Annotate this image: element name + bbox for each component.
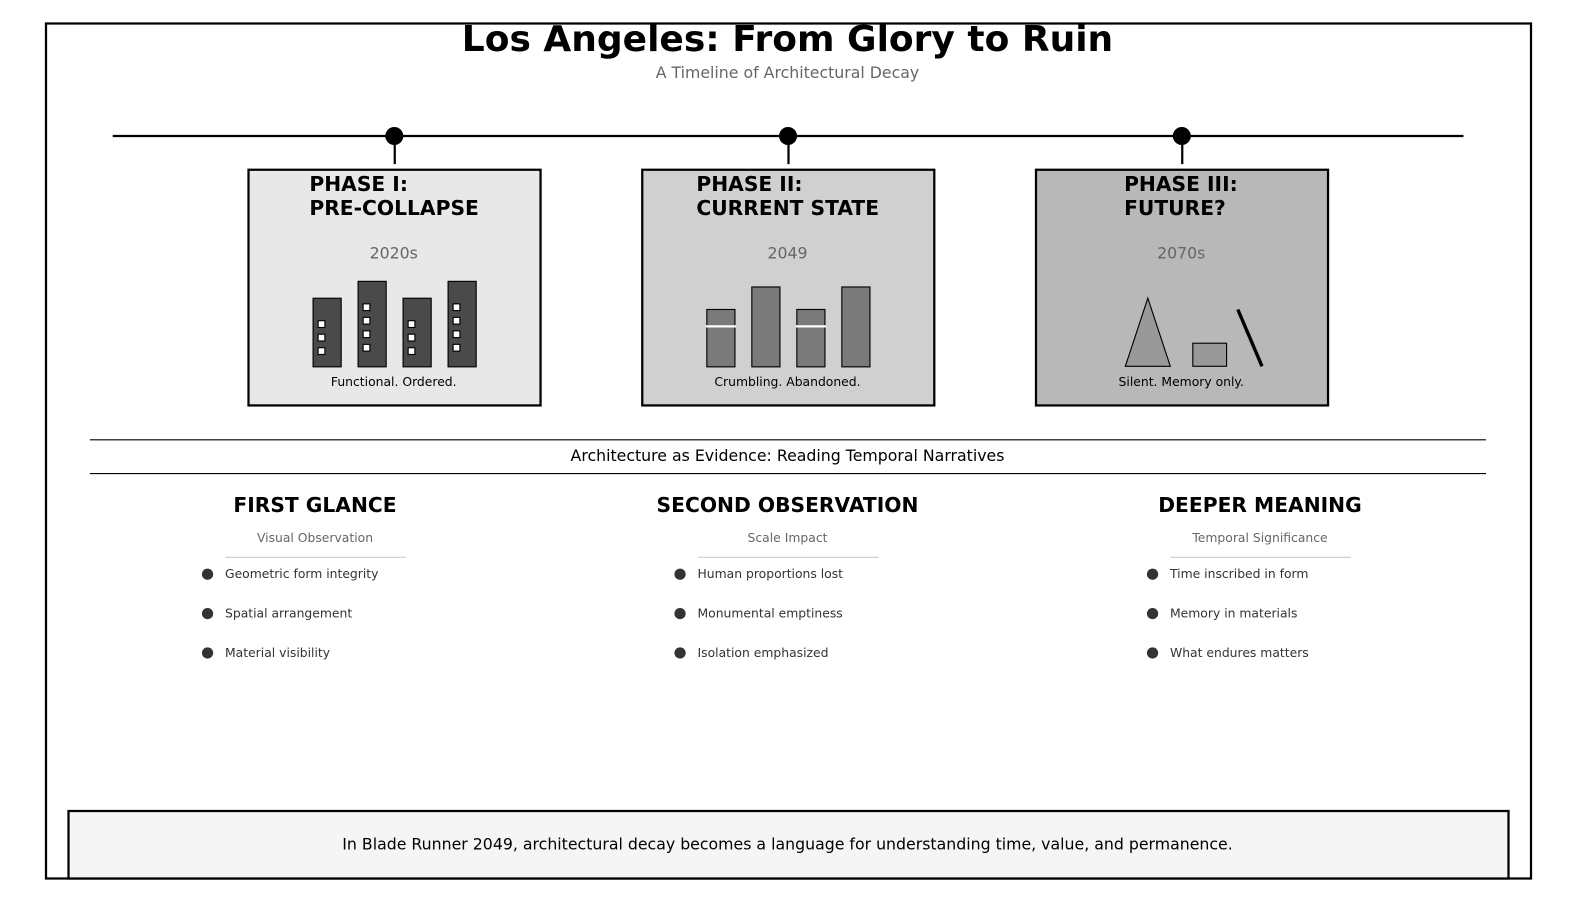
column: second observation	[657, 493, 918, 660]
phase II caption: Crumbling. Abandoned.	[714, 375, 861, 389]
phase I caption: Functional. Ordered.	[331, 375, 457, 389]
conclusion banner	[68, 811, 1508, 878]
phase II date: 2049	[767, 243, 808, 262]
first glance list: Spatial arrangement	[225, 607, 352, 621]
deeper meaning list: What endures matters	[1170, 646, 1309, 660]
deeper meaning list: Memory in materials	[1170, 607, 1297, 621]
first glance subheading: Visual Observation	[257, 531, 373, 545]
timeline marker: phase I	[385, 127, 403, 164]
deeper meaning subheading: Temporal Significance	[1191, 531, 1328, 545]
column: second observation: SECOND OBSERVATION	[657, 493, 918, 517]
conclusion banner: In Blade Runner 2049, architectural decay becomes a language for understanding time, value, and permanence.	[342, 834, 1233, 853]
subtitle: A Timeline of Architectural Decay	[656, 63, 919, 82]
phase III heading: FUTURE?	[1124, 196, 1226, 220]
phase III heading: PHASE III:	[1124, 172, 1238, 196]
panel: phase II current state	[642, 170, 934, 405]
icon: ruins	[1125, 298, 1262, 366]
icon: intact buildings	[313, 281, 476, 367]
phase III caption: Silent. Memory only.	[1119, 375, 1244, 389]
phase II heading: CURRENT STATE	[696, 196, 879, 220]
first glance list: Material visibility	[225, 646, 330, 660]
panel: phase I pre-collapse	[248, 170, 541, 405]
title: Los Angeles: From Glory to Ruin	[462, 19, 1113, 60]
first glance list: Geometric form integrity	[225, 567, 378, 581]
phase III date: 2070s	[1157, 243, 1205, 262]
second observation list: Human proportions lost	[697, 567, 843, 581]
timeline marker: phase II	[779, 127, 797, 164]
timeline	[113, 127, 1463, 164]
deeper meaning list	[1147, 567, 1309, 660]
column: first glance	[202, 493, 406, 660]
phase II heading: PHASE II:	[696, 172, 802, 196]
phase I heading: PHASE I:	[309, 172, 408, 196]
icon: crumbling buildings	[706, 287, 870, 367]
phase I heading: PRE-COLLAPSE	[309, 196, 479, 220]
panel: phase III future	[1036, 170, 1328, 405]
column: deeper meaning	[1147, 493, 1362, 660]
phase I date: 2020s	[370, 243, 418, 262]
column: deeper meaning: DEEPER MEANING	[1158, 493, 1362, 517]
timeline marker: phase III	[1173, 127, 1191, 164]
column: first glance: FIRST GLANCE	[233, 493, 397, 517]
deeper meaning list: Time inscribed in form	[1169, 567, 1308, 581]
second observation list: Monumental emptiness	[697, 607, 843, 621]
second observation list	[674, 567, 843, 660]
second observation subheading: Scale Impact	[748, 531, 828, 545]
second observation list: Isolation emphasized	[697, 646, 828, 660]
first glance list	[202, 567, 378, 660]
section heading band: Architecture as Evidence: Reading Temporal Narratives	[571, 446, 1004, 465]
